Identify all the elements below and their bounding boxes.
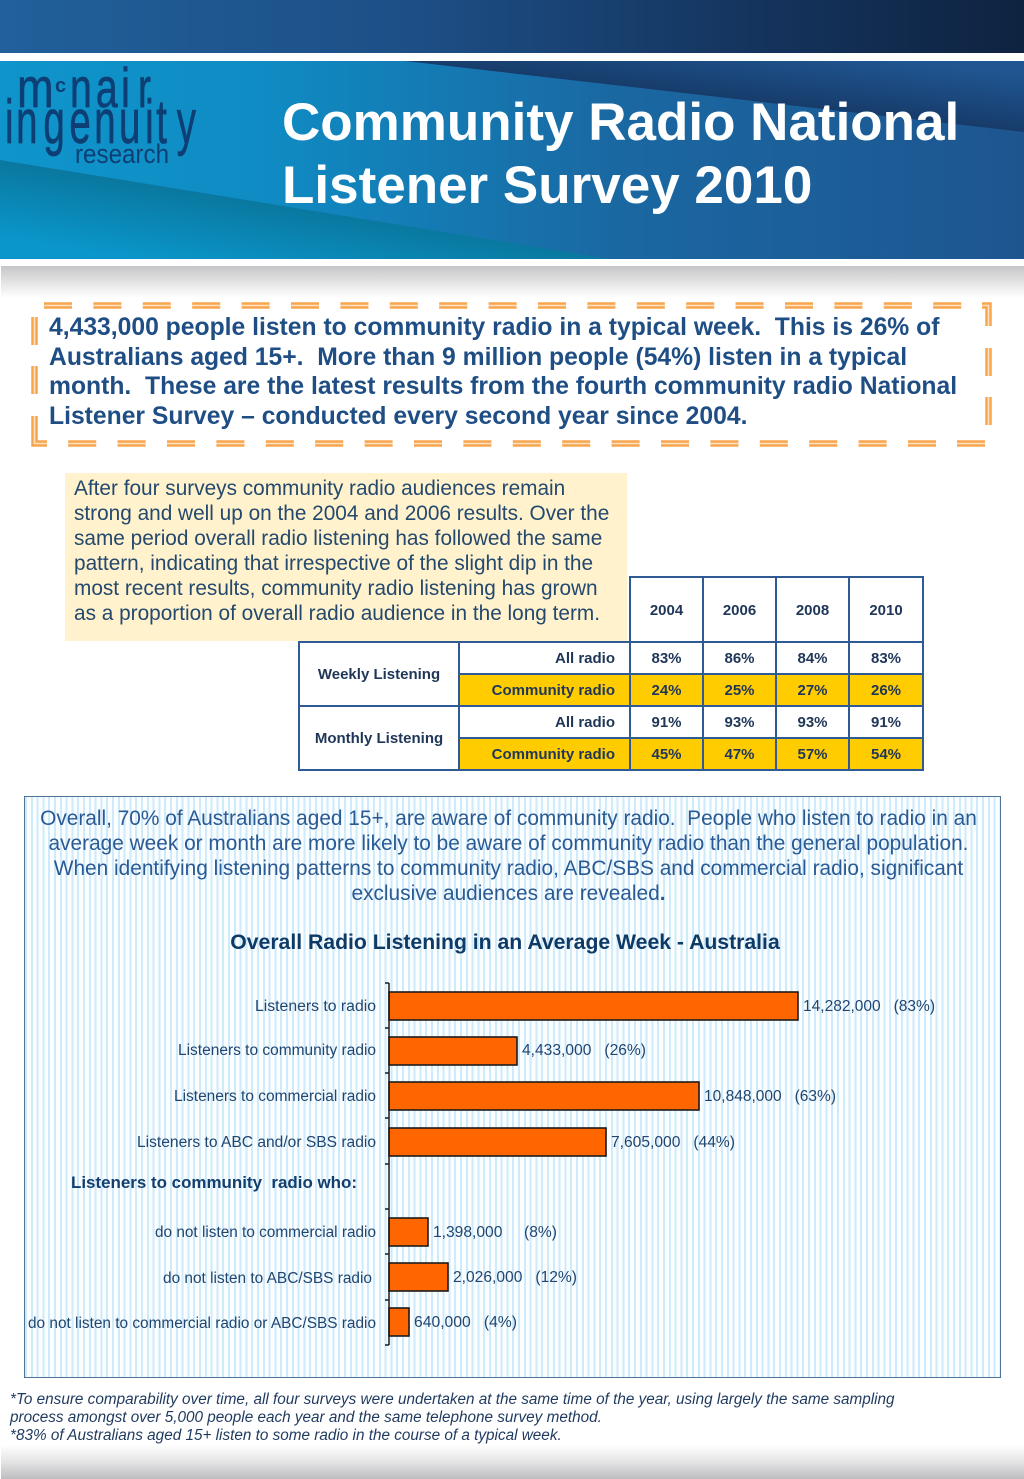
logo: McNair Ingenuity Research: [5, 61, 196, 169]
listening table: Monthly Listening: [315, 730, 443, 747]
listening table: 57%: [797, 746, 828, 763]
bottom grey shade: [1, 1445, 1024, 1479]
bars: [389, 992, 798, 1336]
value labels: 14,282,000 (83%): [803, 998, 935, 1015]
note panel: most recent results, community radio listening has grown: [74, 577, 598, 600]
footnotes: [10, 1391, 895, 1444]
value labels: 640,000 (4%): [414, 1314, 517, 1331]
category labels: Listeners to commercial radio: [174, 1088, 376, 1105]
note panel: same period overall radio listening has followed the same: [74, 527, 602, 550]
value labels: 4,433,000 (26%): [522, 1042, 646, 1059]
awareness text: When identifying listening patterns to community radio, ABC/SBS and commercial radio, significant: [54, 857, 963, 880]
listening table: 93%: [797, 714, 828, 731]
listening table: 91%: [651, 714, 682, 731]
awareness text: Overall, 70% of Australians aged 15+, are aware of community radio. People who listen to radio in an: [40, 807, 977, 830]
category labels: do not listen to commercial radio: [155, 1224, 376, 1241]
value labels: 1,398,000 (8%): [433, 1224, 557, 1241]
footnotes: *83% of Australians aged 15+ listen to some radio in the course of a typical week.: [10, 1427, 562, 1444]
listening table: 24%: [651, 682, 682, 699]
listening table: 27%: [797, 682, 828, 699]
top banner: [0, 0, 1024, 53]
category labels: [28, 998, 376, 1332]
category labels: Listeners to ABC and/or SBS radio: [137, 1134, 376, 1151]
value labels: 7,605,000 (44%): [611, 1134, 735, 1151]
title: Listener Survey 2010: [282, 156, 812, 215]
listening table: [298, 576, 924, 771]
footnotes: process amongst over 5,000 people each year and the same telephone survey method.: [10, 1409, 602, 1426]
listening table: 2008: [796, 602, 829, 618]
logo: McNair Ingenuity Research: ingenuity: [5, 87, 196, 156]
awareness text: [40, 807, 977, 905]
awareness text: average week or month are more likely to be aware of community radio than the general population.: [49, 832, 968, 855]
lead text: 4,433,000 people listen to community radio in a typical week. This is 26% of: [49, 314, 939, 341]
listening table: Community radio: [492, 682, 615, 699]
striped awareness panel: [24, 796, 1001, 1378]
category labels: Listeners to radio: [255, 998, 376, 1015]
note panel: [65, 473, 627, 641]
logo: McNair Ingenuity Research: research: [75, 139, 169, 169]
listening table: Weekly Listening: [318, 666, 440, 683]
lead text: Listener Survey – conducted every second year since 2004.: [49, 403, 747, 430]
listening table: 84%: [797, 650, 828, 667]
top grey shade: [1, 266, 1024, 298]
listening table: 91%: [871, 714, 901, 731]
category labels: Listeners to community radio: [178, 1042, 376, 1059]
category labels: do not listen to commercial radio or ABC/SBS radio: [28, 1315, 376, 1332]
listening table: 54%: [871, 746, 901, 763]
listening table: 25%: [724, 682, 755, 699]
header band: [0, 61, 1024, 259]
footnotes: *To ensure comparability over time, all four surveys were undertaken at the same time of the year, using largely the same sampling: [10, 1391, 895, 1408]
listening table: 93%: [724, 714, 755, 731]
title: Community Radio National: [282, 93, 959, 152]
listening table: 45%: [651, 746, 682, 763]
note panel: as a proportion of overall radio audience in the long term.: [74, 602, 600, 625]
category labels: do not listen to ABC/SBS radio: [163, 1270, 372, 1287]
note panel: strong and well up on the 2004 and 2006 results. Over the: [74, 502, 609, 525]
listening table: All radio: [555, 650, 615, 667]
subheading: Listeners to community radio who:: [71, 1173, 357, 1192]
listening table: Community radio: [492, 746, 615, 763]
listening table: 83%: [871, 650, 901, 667]
axis: [385, 983, 389, 1345]
lead text: Australians aged 15+. More than 9 million people (54%) listen in a typical: [49, 344, 907, 371]
value labels: 2,026,000 (12%): [453, 1269, 577, 1286]
value labels: 10,848,000 (63%): [704, 1088, 836, 1105]
listening table: 86%: [724, 650, 755, 667]
awareness text: exclusive audiences are revealed.: [351, 882, 666, 905]
listening table: All radio: [555, 714, 615, 731]
listening table: 26%: [871, 682, 901, 699]
listening table: 47%: [724, 746, 755, 763]
listening table: 2004: [650, 602, 683, 618]
listening table: 83%: [651, 650, 682, 667]
listening table: 2010: [869, 602, 903, 618]
chart title: Overall Radio Listening in an Average Week - Australia: [230, 931, 780, 954]
lead text: [49, 314, 957, 430]
logo: McNair Ingenuity Research: c: [55, 75, 66, 97]
dashed orange callout border: [31, 302, 992, 447]
value labels: [414, 998, 935, 1331]
bar chart: overall radio listening: [28, 931, 935, 1346]
listening table: 2006: [723, 602, 756, 618]
note panel: After four surveys community radio audiences remain: [74, 477, 565, 500]
lead text: month. These are the latest results from the fourth community radio National: [49, 373, 957, 400]
note panel: pattern, indicating that irrespective of the slight dip in the: [74, 552, 593, 575]
title: [282, 93, 959, 215]
